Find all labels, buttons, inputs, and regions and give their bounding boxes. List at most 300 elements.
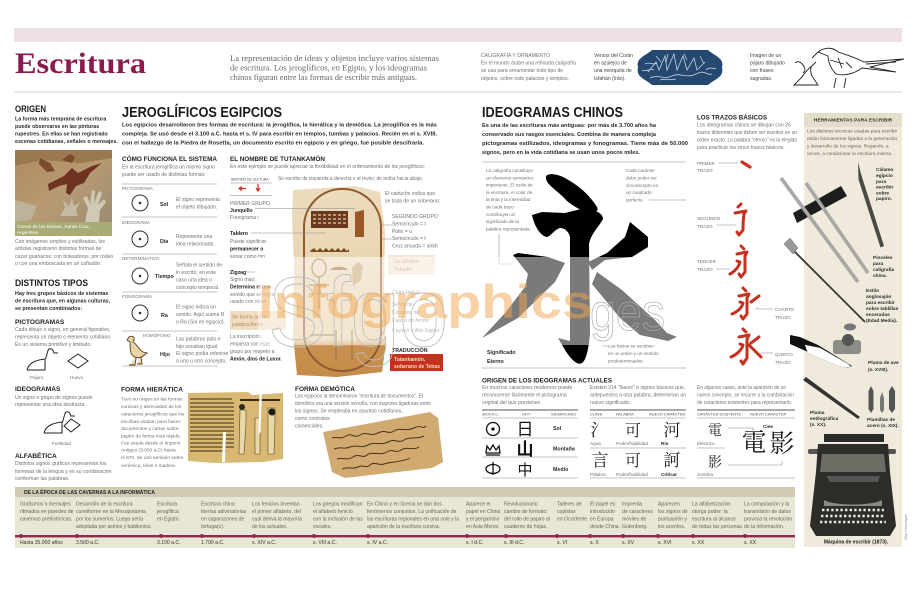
text: veces, a condicionar la escritura misma. <box>807 151 892 157</box>
radical characters: 訶 <box>664 446 680 471</box>
timeline descriptions: en caparazones de <box>201 516 244 522</box>
watermark: Sfgo <box>268 257 448 367</box>
row labels: DETERMINATIVO <box>122 256 160 261</box>
subheading: alfabética: ALFABÉTICA <box>15 451 57 460</box>
heading: CÓMO FUNCIONA EL SISTEMA <box>122 154 217 163</box>
combination characters: 電 <box>708 420 722 440</box>
translation box: soberano de Tebas <box>394 364 440 370</box>
timeline descriptions: por los sumerios. Luego sería <box>76 516 143 522</box>
timeline descriptions: los signos de <box>658 509 688 515</box>
timeline descriptions: ritmados en paredes de <box>20 509 74 515</box>
text: Los egipcios la denominaron "escritura de documentos". El <box>295 394 423 400</box>
intro text: La representación de ideas y objetos incluye varios sistemas <box>230 54 439 63</box>
tool: feather white part <box>805 345 852 368</box>
row words: Hijo <box>160 352 171 358</box>
tool labels: Estilo <box>866 288 879 294</box>
table headers: NUEVO CARÁCTER <box>649 412 686 416</box>
image: cave hands <box>15 150 112 236</box>
timeline dates: s. XV <box>622 540 635 546</box>
stroke labels: TERCER <box>697 259 717 264</box>
table headers: PALABRA <box>616 412 634 416</box>
titles text: Señor de <box>392 302 413 308</box>
image: calligraphic bird <box>794 48 904 88</box>
row words: Tiempo <box>155 274 175 280</box>
peach note right <box>388 255 435 275</box>
timeline descriptions: en Egipto. <box>157 516 180 522</box>
origen text: puede observarse en las pinturas <box>15 124 99 130</box>
callout: calligraphy note: importante. El estilo de <box>486 182 533 188</box>
zigzag text: Determina el uso <box>230 284 271 290</box>
ideogramas intro: Es una de las escrituras más antiguas: por más de 3.700 años ha <box>482 123 656 129</box>
title: Escritura <box>15 47 146 80</box>
reading direction legend: SENTIDO DE LECTURA <box>231 178 269 182</box>
timeline descriptions: los acentos. <box>658 524 685 530</box>
text: como contratos <box>295 416 330 422</box>
cave caption text: artistas registraron distintas formas de <box>15 246 102 252</box>
timeline descriptions: cuneiforme en la Mesopotamia <box>76 509 146 515</box>
radical labels: Poder/habilidad <box>616 441 648 446</box>
callout: calligraphy note: la tinta y la intensidad <box>486 197 531 202</box>
row explanations: El signo podía referirse <box>176 351 229 357</box>
image: wooden tablet <box>323 412 443 478</box>
inscription text: La inscripción <box>230 334 261 340</box>
callout: calligraphy note: significado de la <box>486 219 519 224</box>
row explanations: caso una idea o <box>176 278 212 284</box>
meanings: Sol <box>553 426 562 432</box>
image: cave hands: Argentina <box>17 230 38 236</box>
combination labels: Sombra <box>697 472 714 477</box>
combination labels: Cine <box>763 424 773 429</box>
timeline dates: 3.500 a.C. <box>76 540 100 546</box>
column intro texts: reconocerse fácilmente el pictograma <box>482 392 567 398</box>
combination characters: 影 <box>769 424 795 460</box>
tool labels: (s. XVIII). <box>868 367 888 373</box>
sistema text: puede ser usado de distintas formas: <box>122 172 206 178</box>
modern characters <box>516 415 534 480</box>
zigzag text: Signo mas: <box>230 277 255 283</box>
timeline descriptions: fenómenos conjuntos. La unificación de <box>367 509 457 515</box>
panel: herramientas para escribir <box>781 113 902 547</box>
first group text: Junquillo <box>230 208 253 214</box>
heading: EL NOMBRE DE TUTANKAMÓN <box>230 154 325 163</box>
timeline descriptions: cuaderno de hojas. <box>504 524 547 530</box>
modern characters: 日 <box>516 415 534 440</box>
titles text: Cuyaco = Alto Egipto <box>392 328 440 334</box>
second group text: SEGUNDO GRUPO <box>392 214 438 220</box>
timeline descriptions: de los actuales. <box>252 524 287 530</box>
timeline descriptions: con la inclusión de las <box>313 516 363 522</box>
tool labels: papiro. <box>876 196 892 202</box>
callout: square note: perfecto. <box>626 198 644 202</box>
credit: Sfgo Infoimages <box>904 514 908 540</box>
text: escribas usaban para hacer <box>121 419 181 425</box>
caption: bird: Imagen de un <box>750 53 781 59</box>
inscription text: empieza con este <box>230 342 270 348</box>
translation box: Tutankamón, <box>394 357 426 363</box>
radical characters <box>590 416 680 471</box>
row labels: FONOGRAMA <box>122 294 153 299</box>
panel: distintos tipos <box>15 278 112 482</box>
timeline descriptions: móviles de <box>622 516 647 522</box>
timeline descriptions: el primer alfabeto, del <box>252 509 301 515</box>
distintos tipos text: se presentan combinados: <box>15 306 82 312</box>
first group text: PRIMER GRUPO <box>230 201 270 207</box>
cartouche note: se trata de un soberano: <box>385 198 440 204</box>
top banner band <box>14 28 902 42</box>
row words: Ra <box>161 313 168 319</box>
pictogramas text: Es un sistema primitivo y limitado. <box>15 342 92 348</box>
tool labels: (Edad Media). <box>866 318 897 324</box>
timeline descriptions: aparición de la escritura cursiva. <box>367 524 440 530</box>
tool labels: Pluma de ave <box>868 360 899 366</box>
column intro texts: de caracteres existentes para representarlo. <box>697 400 792 406</box>
translation box <box>390 354 443 371</box>
text: papiro de forma más rápida. <box>121 434 181 440</box>
timeline dates: s. XX <box>744 540 757 546</box>
table headers: SIGNIFICADO <box>551 412 576 416</box>
titles text: Columna de <box>392 310 420 316</box>
stroke labels: TRAZO <box>775 360 791 365</box>
typewriter caption: Máquina de escribir (1873). <box>824 540 889 546</box>
alfabética text: conforman las palabras. <box>15 476 69 482</box>
timeline descriptions: Aparecen <box>658 502 680 508</box>
second group text: Semicírculo = t <box>392 236 426 242</box>
heading: LOS TRAZOS BÁSICOS <box>697 112 768 122</box>
heading: origen: ORIGEN <box>15 104 46 114</box>
caption: bird: pájaro dibujado <box>750 60 785 66</box>
alfabética text: fonemas de la lengua y en su combinación <box>15 469 112 475</box>
timeline line and points <box>15 534 795 538</box>
column intro texts: original del que provienen. <box>482 400 542 406</box>
tool: brushes <box>781 178 868 282</box>
heading: jeroglíficos egipcios: JEROGLÍFICOS EGIPCIOS <box>122 104 282 121</box>
timeline descriptions: otorga poder: la <box>692 509 728 515</box>
image: Quran tile <box>638 50 722 85</box>
text: orden exacto. La palabra "eterno" es la elegida <box>697 138 797 144</box>
timeline descriptions: del rollo de papiro al <box>504 516 550 522</box>
stroke labels: SEGUNDO <box>697 216 721 221</box>
radical labels: Agua <box>590 441 601 446</box>
zigzag text: sonido que se logra <box>230 292 275 298</box>
tablero text: sonar como mn <box>230 254 265 260</box>
pictogramas text: Cada dibujo o signo, en general figurativo, <box>15 327 110 333</box>
heading: FORMA DEMÓTICA <box>295 384 355 393</box>
ideogramas text: representar una idea abstracta. <box>15 402 86 408</box>
cave caption text: Con imágenes simples y estilizadas, los <box>15 239 105 245</box>
callout: square note: un cuadrado <box>626 190 652 195</box>
timeline descriptions: en Occidente. <box>557 516 588 522</box>
icon: bird pictogram <box>27 349 58 370</box>
intro text: de escritura. Los jeroglíficos, en Egipto, y los ideogramas <box>230 64 427 72</box>
stroke labels: CUARTO <box>775 307 795 312</box>
timeline descriptions: En China y en Grecia se dan dos <box>367 502 442 508</box>
timeline descriptions: adoptada por asirios y babilonios. <box>76 524 152 530</box>
icons: sun hieroglyphs <box>132 195 148 321</box>
peach note box: palabra Amón <box>232 322 264 328</box>
radical labels: Palabra <box>590 472 606 477</box>
heading: FORMA HIERÁTICA <box>121 384 183 394</box>
timeline dates: s. IV a.C. <box>367 540 388 546</box>
zigzag text: usado con otros <box>230 299 267 305</box>
text: caracteres jeroglíficos que los <box>121 412 185 418</box>
text: están íntimamente ligadas a la generación <box>807 136 897 142</box>
callout: calligraphy note: un elemento semántico <box>486 176 534 180</box>
text: comerciales. <box>295 424 324 430</box>
peach note box <box>230 311 286 330</box>
row explanations: Representa una <box>176 234 212 240</box>
calligraphy note: CALIGRAFÍA Y ORNAMENTO <box>481 52 550 59</box>
radical labels: Criticar <box>661 472 677 477</box>
peach note box: Se forma así la <box>232 314 266 320</box>
peach note right: Tutankh <box>394 267 412 273</box>
row explanations: Las palabras pato e <box>176 336 221 342</box>
pictogramas text: representa un objeto o elemento cotidiano. <box>15 334 112 340</box>
timeline descriptions: y el pergamino <box>466 516 500 522</box>
panel: forma hierática <box>121 384 283 469</box>
text: Fue usada desde el Imperio <box>121 440 181 446</box>
row words: Sol <box>160 202 169 208</box>
tool labels: sobre <box>876 190 889 196</box>
tool: inkwell <box>833 324 861 354</box>
zigzag text: Zigzag <box>230 270 246 276</box>
caption: Quran verses: una mezquita de <box>594 68 632 74</box>
column intro texts: nuevo concepto, se recurre a la combinación <box>697 392 794 398</box>
ideogram label: Fertilidad <box>52 441 71 446</box>
tablero text: Tablero <box>230 231 248 237</box>
combination labels: Eléctrico <box>697 441 715 446</box>
timeline dates: Hasta 35.000 años <box>20 540 63 546</box>
timeline descriptions: de todas las personas. <box>692 524 743 530</box>
callout: square note: circunscripto en <box>626 183 659 188</box>
icon: egg pictogram <box>68 354 88 368</box>
row explanations: a uno u otro concepto. <box>176 358 227 364</box>
row words: Día <box>160 239 168 245</box>
timeline dates: s. XX <box>692 540 705 546</box>
calligraphy note: En el mundo árabe una refinada caligrafía <box>481 60 576 66</box>
tool labels: Plumillas de <box>867 417 895 423</box>
timeline descriptions: Gutenberg. <box>622 524 648 530</box>
stroke labels: QUINTO <box>775 352 793 357</box>
reading direction legend <box>230 178 272 196</box>
calligraphy note: objetos, sobre todo palacios y templos. <box>481 76 569 82</box>
timeline descriptions: Aparece el <box>466 502 490 508</box>
cave caption text: o con una emboscada en un cañadón. <box>15 261 102 267</box>
inscription text: grupo por respeto a <box>230 349 275 355</box>
tool: fountain pen <box>803 377 860 419</box>
panel: forma demótica <box>295 384 443 478</box>
subtitle: En este ejemplo se puede apreciar la flexibilidad en el ordenamiento de los jeroglíficos: <box>230 164 425 170</box>
heading: distintos tipos: DISTINTOS TIPOS <box>15 278 88 288</box>
translation label: TRADUCCIÓN <box>392 346 428 354</box>
tool labels: escribir <box>876 184 893 190</box>
tool labels: caligrafía <box>873 267 894 273</box>
heading: HERRAMIENTAS PARA ESCRIBIR <box>814 118 893 124</box>
panel: origen <box>15 104 118 267</box>
timeline descriptions: Escritura <box>157 502 177 508</box>
cartouche note: El cartucho indica que <box>385 191 435 197</box>
caption: Quran verses: Versos del Corán <box>594 53 633 59</box>
text: Los ideogramas chinos se dibujan con 26 <box>697 122 791 128</box>
panel: origen de los ideogramas actuales <box>482 378 795 480</box>
pictogram labels: Huevo <box>70 375 84 380</box>
timeline descriptions: Los griegos modifican <box>313 502 363 508</box>
radical characters: 氵 <box>590 416 608 441</box>
radical characters: 可 <box>625 448 641 471</box>
subheading: ideogramas: IDEOGRAMAS <box>15 386 61 393</box>
ideogramas intro: pictogramas estilizados, ideogramas y fonogramas. Tiene más de 50.000 <box>482 141 688 147</box>
tool labels: enceradas <box>866 312 890 318</box>
stroke labels: TRAZO <box>775 315 791 320</box>
timeline dates: 1.700 a.C. <box>201 540 225 546</box>
timeline descriptions: Escritura china <box>201 502 235 508</box>
text: cerámica, telas o madera. <box>121 463 176 469</box>
reading note: Se escribe de izquierda a derecha o al revés; de arriba hacia abajo. <box>278 176 423 182</box>
timeline descriptions: papel en China <box>466 509 500 515</box>
origen text: rupestres. En ellas se han registrado <box>15 132 108 138</box>
callout: stroke order: en un orden y un sentido <box>608 351 659 356</box>
callout: calligraphy note: palabra representada. <box>486 226 531 232</box>
meanings: Medio <box>553 467 569 473</box>
timeline descriptions: cavernas prehistóricas. <box>20 516 72 522</box>
second group text: Pollo = u <box>392 229 412 235</box>
timeline descriptions: de la información. <box>744 524 784 530</box>
timeline dates: s. X <box>590 540 599 546</box>
stroke labels: TRAZO <box>697 224 713 229</box>
timeline descriptions: introducido <box>590 509 615 515</box>
leader lines <box>245 208 392 272</box>
timeline descriptions: copistas <box>557 509 576 515</box>
second group text: Cruz ansada = ankh <box>392 244 438 250</box>
pictogram labels: Pájaro <box>30 375 44 380</box>
column intro texts: En algunos casos, ante la aparición de un <box>697 385 786 391</box>
tool: feather quill <box>790 335 852 368</box>
timeline descriptions: de caracteres <box>622 509 653 515</box>
inscription text: Amón, dios de Luxor. <box>230 356 282 362</box>
timeline dates: s. III d.C. <box>504 540 524 546</box>
timeline descriptions: las escrituras regionales en una sola y la <box>367 516 459 522</box>
stroke labels: TRAZO <box>697 267 713 272</box>
timeline descriptions: provoca la revolución <box>744 516 792 522</box>
subheading: pictogramas: PICTOGRAMAS <box>15 319 65 326</box>
table headers: HOY <box>522 412 531 416</box>
row explanations: El signo representa <box>176 197 220 203</box>
origen text: escenas cotidianas, señales o mensajes. <box>15 139 118 145</box>
image: papyrus <box>188 392 283 463</box>
row explanations: concepto temporal. <box>176 285 219 291</box>
tool labels: egipcio <box>876 173 893 179</box>
ideogramas intro: conservado sus rasgos esenciales. Combina de manera compleja <box>482 132 656 138</box>
character: eternal <box>482 174 677 364</box>
timeline descriptions: en Asia Menor. <box>466 524 500 530</box>
column intro texts: antepuestos a otra palabra, determinan un <box>590 392 686 398</box>
calligraphy note: se usa para ornamentar todo tipo de <box>481 68 563 74</box>
heading: ORIGEN DE LOS IDEOGRAMAS ACTUALES <box>482 378 613 384</box>
row explanations: El signo indica un <box>176 304 216 310</box>
text: los signos. Se empleaba en asuntos cotidianos, <box>295 408 403 414</box>
icon: duck hieroglyph <box>127 336 147 365</box>
row rules <box>122 184 217 366</box>
radical characters: 言 <box>592 446 608 471</box>
titles text: Castro de Amón <box>392 318 429 324</box>
timeline dates: s. I d.C. <box>466 540 484 546</box>
timeline descriptions: El papel es <box>590 502 616 508</box>
stroke labels: TRAZO <box>697 168 713 173</box>
callout: calligraphy note: la escritura, el color de <box>486 190 533 195</box>
tool labels: (s. XX). <box>810 422 826 428</box>
radical characters: 可 <box>625 418 641 441</box>
callout: stroke order: predeterminados. <box>608 358 644 364</box>
ideogramas intro: signos, pero en la vida cotidiana se usan unos pocos miles. <box>482 150 641 156</box>
watermark: ges <box>590 284 665 342</box>
text: para practicar los cinco trazos básicos. <box>697 145 785 151</box>
cave caption text: cazar guanacos: con boleadoras, por rodeo <box>15 254 113 260</box>
text: cursivas y abreviadas de los <box>121 404 182 410</box>
meaning label: Eterno <box>487 359 505 365</box>
text: demótico era una versión sencilla, con mayores ligaduras entre <box>295 401 431 407</box>
tool labels: Cálamo <box>876 167 893 173</box>
callout: calligraphy note: La caligrafía constituye <box>486 168 533 173</box>
panel: los trazos básicos <box>697 112 797 365</box>
tool labels: Pinceles <box>873 255 893 261</box>
meaning label: Significado <box>487 350 516 356</box>
table headers: CARÁCTER EXISTENTE <box>697 412 742 416</box>
watermark <box>258 257 690 367</box>
header rule <box>14 91 902 93</box>
jeroglíficos intro: Los egipcios desarrollaron tres formas de escritura: la jeroglífica, la hierática y la demótica. La jeroglífica es la más <box>122 122 437 128</box>
ideogramas text: Un signo o grupo de signos puede <box>15 395 93 401</box>
column intro texts: nuevo significado: <box>590 400 631 406</box>
row labels: IDEOGRAMA <box>122 220 151 225</box>
tool: steel nibs <box>868 386 895 413</box>
timeline <box>15 487 795 548</box>
timeline descriptions: desde China. <box>590 524 620 530</box>
caption: bird: con frases <box>750 68 774 74</box>
column intro texts: En muchos caracteres modernos puede <box>482 385 572 391</box>
stroke labels: PRIMER <box>697 161 716 166</box>
panel: cómo funciona el sistema <box>122 154 229 366</box>
row labels: PICTOGRAMA <box>122 186 154 191</box>
timeline descriptions: La computación y la <box>744 502 789 508</box>
radical labels: Río <box>661 441 669 446</box>
distintos tipos text: de escritura que, en algunas culturas, <box>15 298 111 304</box>
row explanations: idea relacionada. <box>176 242 215 248</box>
caption: bird: sagradas. <box>750 76 772 82</box>
timeline descriptions: titerías adivinatorias <box>201 509 247 515</box>
watermark: Infographics <box>258 275 593 328</box>
timeline descriptions: jeroglífica <box>156 509 179 515</box>
text: Tuvo su origen en las formas <box>121 396 183 402</box>
row labels: HOMÓFONO <box>143 332 171 338</box>
image: cave hands: Cueva de las Manos, Santa Cruz, <box>17 224 90 230</box>
callout: square note: Cada carácter <box>626 168 655 173</box>
sistema text: En la escritura jeroglífica un mismo signo <box>122 164 215 170</box>
icon: fertility ideogram <box>44 412 80 433</box>
origen text: La forma más temprana de escritura <box>15 116 106 122</box>
timeline descriptions: Imprenta <box>622 502 642 508</box>
tablero text: Puede significar <box>230 239 267 245</box>
row explanations: Señala el sentido de <box>176 262 222 268</box>
combination characters: 影 <box>708 452 722 472</box>
table headers: 3000 A.C. <box>482 412 499 416</box>
radical characters: 河 <box>664 416 680 441</box>
timeline descriptions: Talleres de <box>557 502 582 508</box>
timeline dates: s. XVI <box>658 540 672 546</box>
tool labels: sobre tablillas <box>866 306 899 312</box>
row explanations: sonido. Aquí suena R <box>176 312 225 318</box>
tool: ink stick <box>793 186 847 223</box>
alfabética text: Distintos signos gráficos representan los <box>15 461 107 467</box>
text: documentos y cartas sobre <box>121 426 179 432</box>
